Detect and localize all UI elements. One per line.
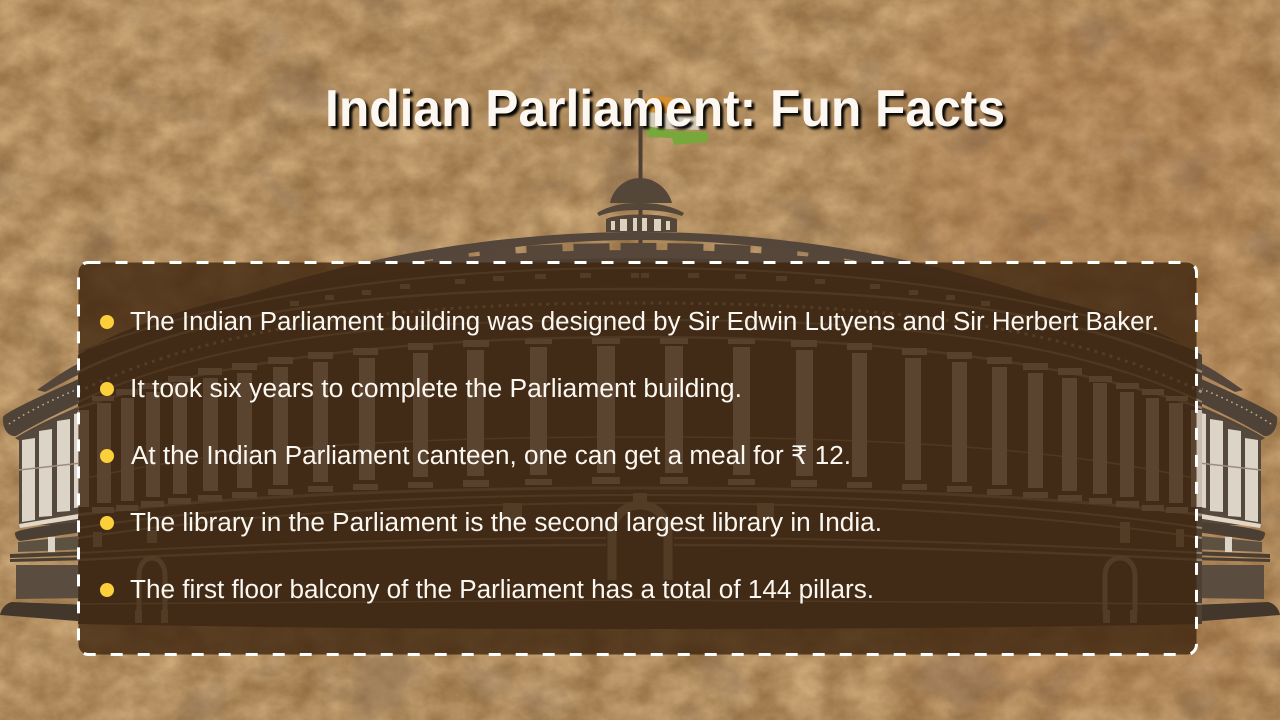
fact 5: The first floor balcony of the Parliament has a total of 144 pillars.	[130, 576, 874, 604]
battlements	[340, 247, 940, 272]
dome windows	[611, 218, 670, 231]
building body behind panel	[78, 258, 1202, 629]
illustration: parliament building	[0, 90, 1280, 629]
right wing	[1190, 358, 1280, 622]
icon: Indian flag	[645, 97, 708, 145]
roof arc	[37, 232, 1243, 392]
fact 4: The library in the Parliament is the second largest library in India.	[130, 509, 882, 537]
fact 1: The Indian Parliament building was designed by Sir Edwin Lutyens and Sir Herbert Baker.	[130, 308, 1159, 336]
frieze bands	[78, 268, 1202, 604]
flag pole	[638, 90, 642, 262]
left wing	[0, 358, 90, 622]
panel: fun facts	[78, 262, 1196, 654]
panel background with dashed border	[78, 262, 1196, 654]
wall piers	[93, 493, 1184, 547]
arched door bases	[135, 610, 1137, 623]
title: Indian Parliament: Fun Facts	[325, 80, 1005, 138]
frieze small blocks	[290, 273, 990, 306]
right columns	[660, 338, 1202, 513]
fact 3: At the Indian Parliament canteen, one can get a meal for ₹ 12.	[131, 442, 851, 470]
fact 2: It took six years to complete the Parliament building.	[130, 375, 742, 403]
left columns	[78, 338, 620, 513]
ground-floor arched doors	[139, 505, 1135, 612]
central dome	[597, 178, 684, 232]
